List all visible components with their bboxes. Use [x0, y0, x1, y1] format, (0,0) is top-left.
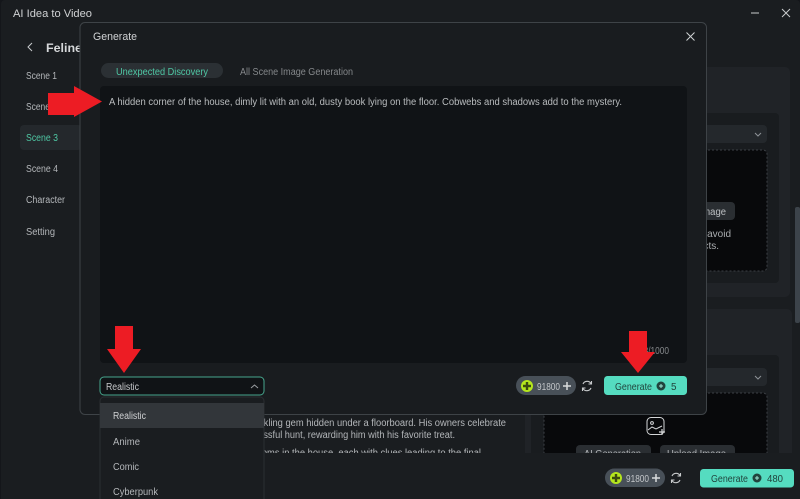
arrow: points to style dropdown — [107, 326, 141, 373]
scrollbar — [795, 207, 800, 323]
panel: generate modal — [80, 22, 706, 414]
footer: credits pill — [605, 468, 665, 487]
scene description text: in the rooms in the house, each with clues leading to the final — [228, 448, 481, 459]
footer: credits pill: 91800 — [626, 474, 649, 485]
panel: background image settings top: objects. — [685, 241, 719, 252]
icon: add image — [647, 418, 665, 435]
sidebar: scene navigation: Setting — [26, 227, 55, 238]
window controls — [751, 9, 790, 17]
sidebar: scene navigation: Scene 4 — [26, 164, 58, 175]
tab: unexpected discovery: Unexpected Discovery — [116, 67, 208, 78]
style dropdown: Realistic — [106, 382, 139, 393]
sidebar: scene navigation: Scene 2 — [26, 102, 57, 113]
scene description text: his successful hunt, rewarding him with his favorite treat. — [225, 430, 455, 441]
panel: background image settings top: Upload Image — [667, 207, 726, 218]
style dropdown menu: Cyberpunk — [113, 487, 159, 498]
scene description text — [264, 418, 506, 453]
footer: generate button: Generate — [711, 474, 748, 485]
prompt text: A hidden corner of the house, dimly lit with an old, dusty book lying on the floor. Cobwebs and shadows add to the mystery. — [109, 97, 622, 108]
style dropdown — [100, 377, 264, 395]
panel: background image settings bottom: Upload Image — [667, 449, 726, 460]
sidebar: scene navigation: Character — [26, 195, 66, 206]
footer: refresh icon — [672, 473, 680, 483]
modal title: Generate — [93, 31, 137, 43]
style dropdown menu: Anime — [113, 437, 140, 448]
modal generate button: Generate — [615, 382, 652, 393]
back chevron — [28, 43, 32, 51]
project title: Feline — [46, 41, 82, 55]
modal credits pill — [516, 376, 576, 395]
style dropdown menu: Realistic — [113, 411, 146, 422]
panel: background image settings bottom — [544, 368, 768, 453]
divider bar: footer — [1, 453, 800, 499]
arrow: points to generate button — [621, 331, 655, 373]
panel: background image settings bottom: AI Generation — [584, 449, 641, 460]
footer: generate button: 480 — [767, 474, 783, 485]
modal generate button — [604, 376, 687, 395]
tab: unexpected discovery — [101, 63, 223, 78]
sidebar: scene navigation: Scene 1 — [26, 71, 57, 82]
modal credits pill: 91800 — [537, 382, 560, 393]
modal refresh icon — [582, 381, 592, 391]
sidebar: scene navigation — [20, 71, 82, 238]
app title: AI Idea to Video — [13, 8, 92, 20]
character counter: 93/1000 — [639, 346, 669, 357]
style dropdown menu — [100, 397, 264, 499]
style dropdown menu: Comic — [113, 462, 139, 473]
sidebar: scene navigation: Scene 3 — [26, 133, 58, 144]
scene description text: Max finds a sparkling gem hidden under a floorboard. His owners celebrate — [195, 418, 506, 429]
modal generate button: 5 — [671, 382, 677, 393]
prompt text area — [100, 86, 687, 363]
footer: generate button — [700, 469, 794, 488]
modal close icon — [686, 32, 694, 40]
panel: background image settings top — [525, 67, 790, 297]
tab: all scene image generation: All Scene Image Generation — [240, 67, 353, 78]
arrow: points to prompt text — [48, 86, 102, 117]
panel: background image settings top: avoid — [707, 229, 731, 240]
